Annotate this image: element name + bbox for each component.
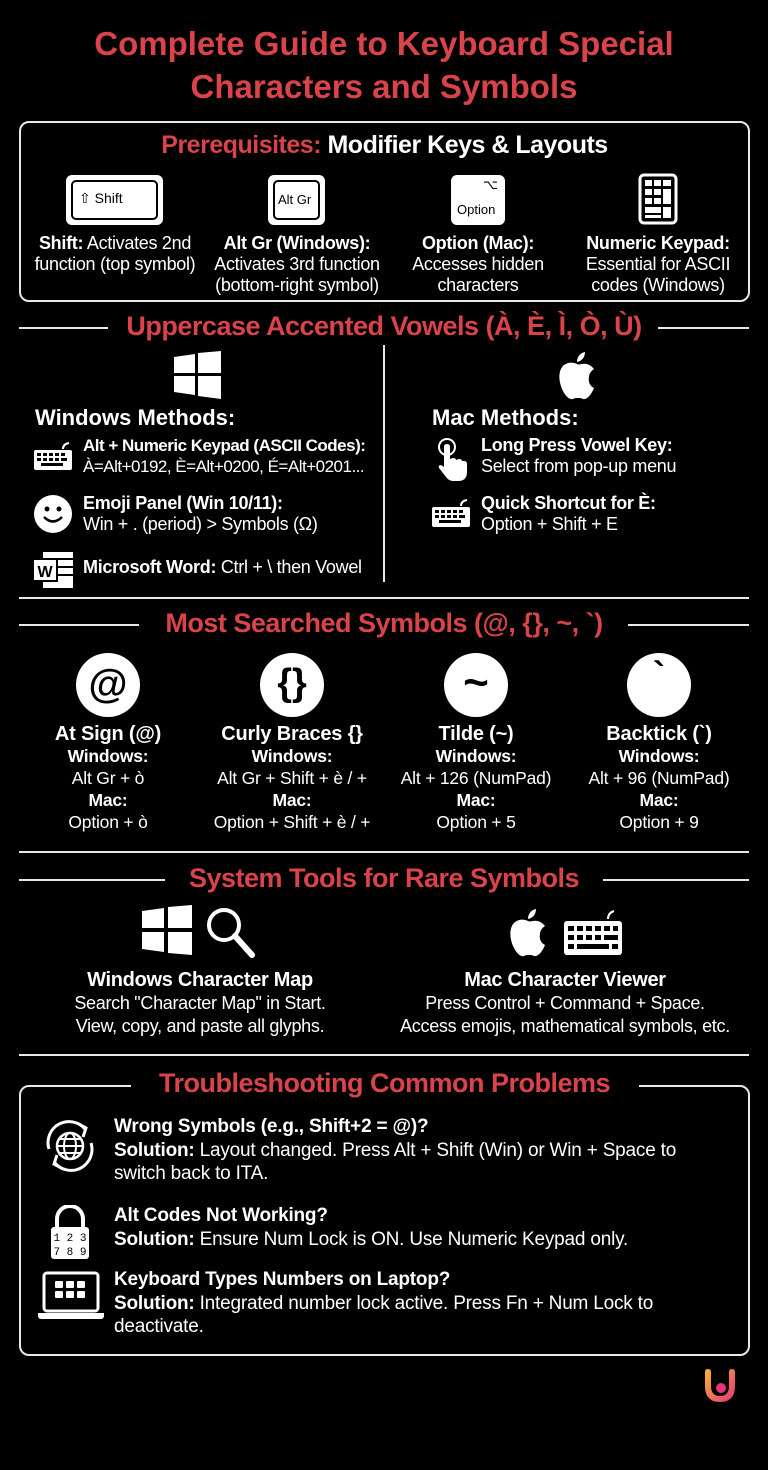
text: option: characters xyxy=(437,275,519,295)
text: laptop numbers: deactivate. xyxy=(114,1316,204,1337)
text: at sign details: At Sign (@) xyxy=(55,723,161,745)
icon: number lock: 7 8 9 xyxy=(53,1247,87,1259)
title: Complete Guide to Keyboard Special xyxy=(94,25,674,62)
text: word: Microsoft Word: Ctrl + \ then Vowel xyxy=(83,557,362,577)
text: alt gr: Activates 3rd function xyxy=(214,254,380,274)
text: quick shortcut: Quick Shortcut for È: xyxy=(481,493,656,513)
icon: windows logo xyxy=(174,351,221,399)
text: alt numeric: Alt + Numeric Keypad (ASCII Codes): xyxy=(83,436,365,455)
heading: windows methods: Windows Methods: xyxy=(35,405,235,430)
text: backtick details: Alt + 96 (NumPad) xyxy=(588,768,730,788)
icon: word: W xyxy=(37,564,53,581)
icon: number lock xyxy=(51,1205,89,1259)
text: backtick details xyxy=(588,723,730,832)
icon: keyboard xyxy=(34,442,72,470)
text: option xyxy=(412,233,544,295)
text: keypad: Essential for ASCII xyxy=(586,254,730,274)
title: Characters and Symbols xyxy=(190,68,577,105)
panel: mac methods xyxy=(432,405,676,534)
text: alt gr: (bottom-right symbol) xyxy=(215,275,379,295)
text: braces details: Curly Braces {} xyxy=(221,723,363,745)
text: option: Option (Mac): xyxy=(422,233,534,253)
panel: windows methods xyxy=(34,405,365,588)
text: tilde details: Tilde (~) xyxy=(438,723,514,745)
icon: shift key xyxy=(66,175,163,225)
text: shift: Shift: Activates 2nd xyxy=(39,233,191,253)
text: braces details: Mac: xyxy=(272,790,312,810)
icon: braces circle: {} xyxy=(277,662,307,704)
panel: backtick xyxy=(588,653,730,832)
icon: apple logo xyxy=(559,352,594,400)
text: long press: Select from pop-up menu xyxy=(481,456,676,476)
text: laptop numbers: Keyboard Types Numbers on Laptop? xyxy=(114,1269,450,1290)
icon: option key: ⌥ xyxy=(483,177,498,192)
icon: apple and keyboard xyxy=(510,909,622,956)
icon: smiley xyxy=(34,495,72,533)
text: long press: Long Press Vowel Key: xyxy=(481,435,672,455)
text: emoji panel: Emoji Panel (Win 10/11): xyxy=(83,493,283,513)
panel: windows character map xyxy=(74,905,326,1036)
icon: word xyxy=(34,552,73,588)
panel: prerequisites xyxy=(19,121,750,302)
icon: shift key: ⇧ Shift xyxy=(79,190,123,206)
text: braces details: Alt Gr + Shift + è / + xyxy=(217,768,367,788)
icon: tilde circle xyxy=(444,653,508,717)
text: backtick details: Mac: xyxy=(639,790,679,810)
text: character viewer: Mac Character Viewer xyxy=(464,969,666,991)
text: alt gr xyxy=(214,233,380,295)
text: wrong symbols: switch back to ITA. xyxy=(114,1163,268,1184)
heading: most searched symbols: Most Searched Symbols (@, {}, ~, `) xyxy=(165,608,603,638)
text: alt codes xyxy=(114,1205,628,1250)
icon: windows and magnifier xyxy=(142,905,255,958)
text: quick shortcut xyxy=(481,492,656,534)
text: backtick details: Option + 9 xyxy=(619,812,699,832)
icon: brand logo xyxy=(703,1368,737,1404)
panel: troubleshooting xyxy=(19,1085,750,1356)
text: at sign details: Windows: xyxy=(68,746,148,766)
icon: at circle: @ xyxy=(88,662,128,706)
heading: troubleshooting: Troubleshooting Common Problems xyxy=(159,1068,610,1098)
icon: alt gr key xyxy=(268,175,325,225)
text: shift xyxy=(34,233,195,274)
text: character map xyxy=(74,969,326,1036)
icon: braces circle xyxy=(260,653,324,717)
text: laptop numbers xyxy=(114,1268,653,1338)
text: option: Accesses hidden xyxy=(412,254,544,274)
icon: numeric keypad xyxy=(638,174,678,224)
text: keypad xyxy=(586,233,730,295)
icon: keyboard xyxy=(432,499,470,527)
text: long press xyxy=(481,435,676,476)
text: emoji panel xyxy=(83,493,318,534)
icon: alt gr key: Alt Gr xyxy=(278,192,311,207)
text: alt numeric: À=Alt+0192, È=Alt+0200, É=Alt+0201... xyxy=(83,457,364,476)
text: character map: View, copy, and paste all glyphs. xyxy=(76,1016,324,1036)
icon: laptop xyxy=(38,1272,104,1319)
text: alt gr: Alt Gr (Windows): xyxy=(224,233,370,253)
text: alt numeric xyxy=(83,436,365,476)
text: tilde details xyxy=(400,723,551,832)
heading: system tools: System Tools for Rare Symbols xyxy=(189,863,579,893)
text: character viewer: Press Control + Command + Space. xyxy=(425,993,705,1013)
text: wrong symbols: Wrong Symbols (e.g., Shift+2 = @)? xyxy=(114,1116,428,1137)
text: keypad: Numeric Keypad: xyxy=(586,233,730,253)
text: at sign details xyxy=(55,723,161,832)
text: braces details: Windows: xyxy=(252,746,332,766)
text: character map: Search "Character Map" in Start. xyxy=(74,993,326,1013)
text: at sign details: Mac: xyxy=(88,790,128,810)
text: at sign details: Alt Gr + ò xyxy=(72,768,144,788)
text: at sign details: Option + ò xyxy=(68,812,148,832)
icon: globe sync xyxy=(46,1120,94,1172)
heading: uppercase accented vowels: Uppercase Accented Vowels (À, È, Ì, Ò, Ù) xyxy=(126,311,642,341)
text: tilde details: Windows: xyxy=(436,746,516,766)
text: alt codes: Alt Codes Not Working? xyxy=(114,1205,328,1226)
title xyxy=(94,25,674,105)
icon: backtick circle: ` xyxy=(653,654,665,695)
text: braces details: Option + Shift + è / + xyxy=(214,812,370,832)
icon: at circle xyxy=(76,653,140,717)
icon: backtick circle xyxy=(627,653,691,717)
text: character viewer: Access emojis, mathematical symbols, etc. xyxy=(400,1016,730,1036)
heading: prerequisites: Prerequisites: Modifier Keys & Layouts xyxy=(161,131,608,159)
text: laptop numbers: Solution: Integrated number lock active. Press Fn + Num Lock to xyxy=(114,1292,653,1314)
icon: number lock: 1 2 3 xyxy=(53,1233,87,1245)
panel: tilde xyxy=(400,653,551,832)
text: quick shortcut: Option + Shift + E xyxy=(481,514,618,534)
text: tilde details: Alt + 126 (NumPad) xyxy=(401,768,551,788)
text: tilde details: Option + 5 xyxy=(436,812,516,832)
panel: mac character viewer xyxy=(400,909,730,1036)
icon: tilde circle: ~ xyxy=(463,658,489,707)
text: braces details xyxy=(214,723,370,832)
text: backtick details: Backtick (`) xyxy=(606,723,712,745)
text: character map: Windows Character Map xyxy=(87,969,313,991)
text: wrong symbols xyxy=(114,1116,676,1184)
icon: finger press xyxy=(438,438,467,481)
icon: option key xyxy=(451,175,505,225)
text: emoji panel: Win + . (period) > Symbols (Ω) xyxy=(83,514,318,534)
text: character viewer xyxy=(400,969,730,1036)
text: backtick details: Windows: xyxy=(619,746,699,766)
icon: option key: Option xyxy=(457,202,495,217)
panel: at sign xyxy=(55,653,161,832)
heading: mac methods: Mac Methods: xyxy=(432,405,579,430)
text: alt codes: Solution: Ensure Num Lock is ON. Use Numeric Keypad only. xyxy=(114,1229,628,1250)
text: wrong symbols: Solution: Layout changed. Press Alt + Shift (Win) or Win + Space to xyxy=(114,1140,676,1160)
text: keypad: codes (Windows) xyxy=(591,275,725,295)
panel: curly braces xyxy=(214,653,370,832)
text: shift: function (top symbol) xyxy=(35,254,195,274)
text: tilde details: Mac: xyxy=(456,790,496,810)
